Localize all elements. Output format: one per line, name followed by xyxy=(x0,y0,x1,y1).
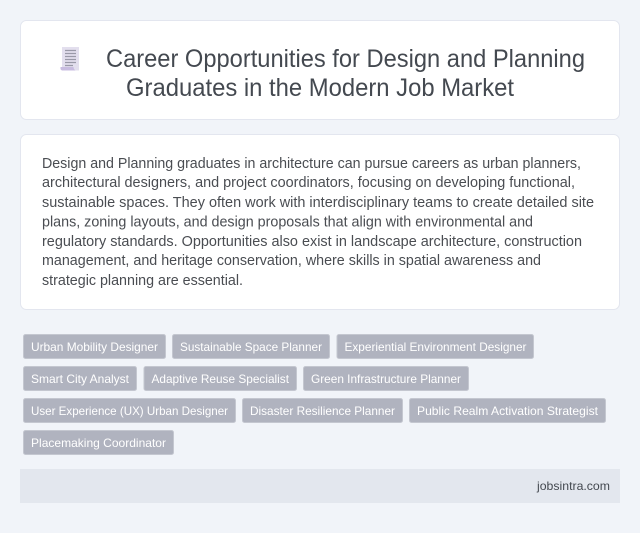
text block: description: management, and heritage conservation, where skills in spatial awareness and xyxy=(42,253,541,269)
text block: description: Design and Planning graduates in architecture can pursue careers as urban planners, xyxy=(42,156,581,172)
title xyxy=(106,45,585,102)
tag: User Experience (UX) Urban Designer: User Experience (UX) Urban Designer xyxy=(31,404,228,418)
tag: Adaptive Reuse Specialist xyxy=(144,366,296,390)
footer source text: jobsintra.com xyxy=(536,479,610,493)
text block: description: strategic planning are essential. xyxy=(42,273,243,289)
icon: document scroll xyxy=(60,47,79,70)
tag: Placemaking Coordinator xyxy=(24,430,174,454)
tag: Green Infrastructure Planner xyxy=(304,366,468,390)
text block: description xyxy=(42,156,594,289)
tag: Smart City Analyst: Smart City Analyst xyxy=(31,372,130,386)
tag: Disaster Resilience Planner: Disaster Resilience Planner xyxy=(250,404,395,418)
text block: description: sustainable spaces. They often work with interdisciplinary teams to create detailed site xyxy=(42,195,594,211)
tag: Green Infrastructure Planner: Green Infrastructure Planner xyxy=(311,372,461,386)
title: Career Opportunities for Design and Planning xyxy=(106,45,585,73)
tag: Sustainable Space Planner xyxy=(172,334,330,358)
tag: Disaster Resilience Planner xyxy=(242,398,402,422)
tag: Placemaking Coordinator: Placemaking Coordinator xyxy=(31,436,166,450)
text block: description: plans, zoning layouts, and design proposals that align with environmental and xyxy=(42,214,533,230)
panel: description xyxy=(20,134,620,310)
text block: description: regulatory standards. Opportunities also exist in landscape architecture, construction xyxy=(42,234,582,250)
tag: User Experience (UX) Urban Designer xyxy=(24,398,236,422)
tag: Smart City Analyst xyxy=(24,366,136,390)
title: Graduates in the Modern Job Market xyxy=(126,74,514,102)
tag list xyxy=(24,334,606,454)
tag: Public Realm Activation Strategist xyxy=(410,398,606,422)
tag: Sustainable Space Planner: Sustainable Space Planner xyxy=(180,340,322,354)
tag: Experiential Environment Designer: Experiential Environment Designer xyxy=(344,340,526,354)
text block: description: architectural designers, and project coordinators, focusing on developing functional, xyxy=(42,175,575,191)
tag: Urban Mobility Designer xyxy=(24,334,166,358)
footer xyxy=(20,469,620,503)
tag: Urban Mobility Designer: Urban Mobility Designer xyxy=(31,340,158,354)
tag: Public Realm Activation Strategist: Public Realm Activation Strategist xyxy=(417,404,599,418)
panel: header xyxy=(20,20,620,120)
tag: Experiential Environment Designer xyxy=(337,334,534,358)
tag: Adaptive Reuse Specialist: Adaptive Reuse Specialist xyxy=(152,372,290,386)
